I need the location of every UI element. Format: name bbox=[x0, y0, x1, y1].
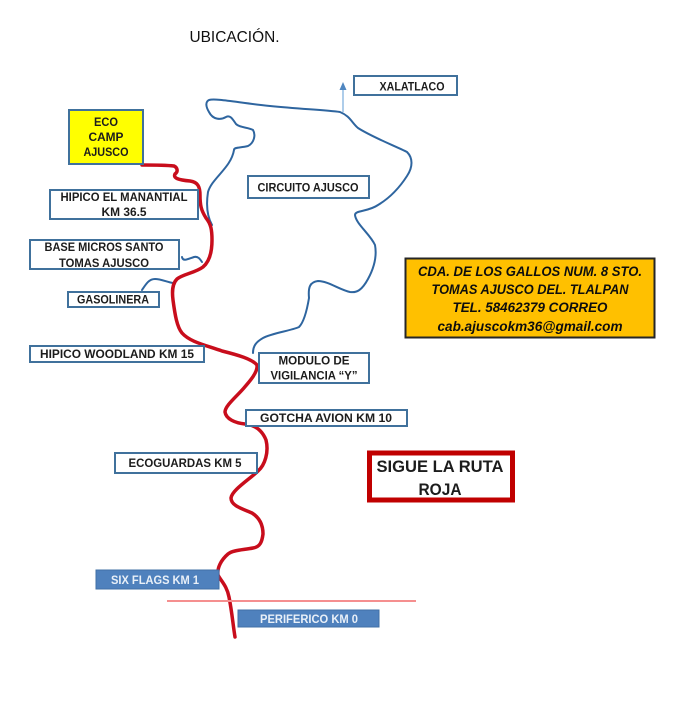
panel: address and contact: TEL. 58462379 CORREO bbox=[452, 300, 608, 315]
label: base micros santo tomas ajusco: BASE MICROS SANTO bbox=[44, 240, 164, 254]
red route bbox=[142, 165, 267, 637]
label: ecoguardas bbox=[115, 453, 257, 473]
blue branch: base micros bbox=[182, 257, 202, 262]
callout: sigue la ruta roja bbox=[370, 453, 512, 500]
label: gasolinera: GASOLINERA bbox=[77, 292, 149, 306]
label: eco camp ajusco bbox=[69, 110, 143, 164]
label: circuito ajusco bbox=[248, 176, 369, 198]
label: hipico woodland: HIPICO WOODLAND KM 15 bbox=[40, 347, 194, 361]
callout: sigue la ruta roja: ROJA bbox=[418, 480, 462, 499]
label: six flags bbox=[96, 570, 219, 589]
blue branch: gasolinera bbox=[142, 279, 173, 290]
panel: address and contact: cab.ajuscokm36@gmail.com bbox=[438, 319, 622, 334]
label: eco camp ajusco: ECO bbox=[94, 115, 118, 129]
label: hipico el manantial: KM 36.5 bbox=[102, 205, 147, 219]
blue road: circuito ajusco loop bbox=[206, 100, 412, 353]
label: circuito ajusco: CIRCUITO AJUSCO bbox=[258, 180, 358, 194]
label: modulo de vigilancia: VIGILANCIA “Y” bbox=[270, 368, 358, 382]
label: six flags: SIX FLAGS KM 1 bbox=[111, 573, 199, 587]
label: hipico el manantial bbox=[50, 190, 198, 219]
panel: address and contact: TOMAS AJUSCO DEL. TLALPAN bbox=[432, 282, 629, 297]
periferico line bbox=[167, 600, 416, 602]
label: modulo de vigilancia bbox=[259, 353, 369, 383]
label: periferico: PERIFERICO KM 0 bbox=[260, 612, 358, 626]
title: UBICACIÓN. bbox=[190, 27, 280, 46]
panel: address and contact bbox=[406, 258, 654, 338]
panel: address and contact: CDA. DE LOS GALLOS NUM. 8 STO. bbox=[418, 264, 642, 279]
arrow: to xalatlaco bbox=[340, 82, 346, 112]
label: xalatlaco: XALATLACO bbox=[380, 80, 444, 94]
label: modulo de vigilancia: MODULO DE bbox=[278, 354, 350, 368]
label: base micros santo tomas ajusco: TOMAS AJUSCO bbox=[59, 256, 149, 270]
label: eco camp ajusco: CAMP bbox=[88, 130, 124, 144]
label: hipico el manantial: HIPICO EL MANANTIAL bbox=[60, 190, 188, 204]
label: gotcha avion: GOTCHA AVION KM 10 bbox=[260, 411, 392, 425]
label: xalatlaco bbox=[354, 76, 457, 95]
label: eco camp ajusco: AJUSCO bbox=[84, 145, 128, 159]
label: base micros santo tomas ajusco bbox=[30, 240, 179, 270]
label: periferico bbox=[238, 610, 379, 627]
label: ecoguardas: ECOGUARDAS KM 5 bbox=[128, 456, 242, 470]
callout: sigue la ruta roja: SIGUE LA RUTA bbox=[376, 457, 504, 476]
